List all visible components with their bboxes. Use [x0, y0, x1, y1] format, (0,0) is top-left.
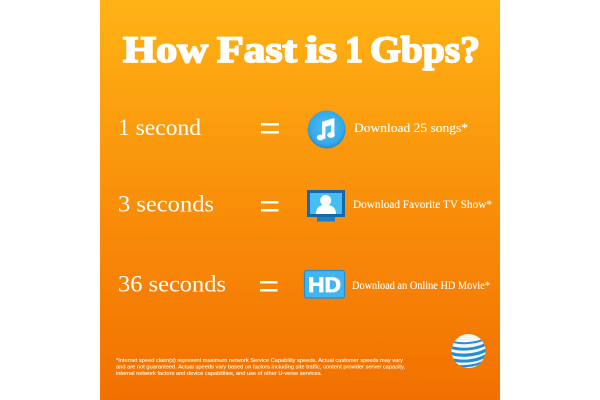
equals sign — [260, 281, 278, 292]
time label: 36 seconds — [118, 272, 226, 296]
title: 1 — [345, 30, 363, 71]
title: is — [305, 30, 337, 71]
icon: AT&T globe logo — [450, 334, 487, 368]
icon: TV with person — [307, 190, 345, 222]
description: Download an Online HD Movie* — [352, 280, 490, 292]
time label: 3 seconds — [118, 192, 214, 216]
icon: HD badge — [304, 270, 344, 298]
footnote: and are not guaranteed. Actual speeds vary based on factors including site traffic, content provider server capacity, — [116, 364, 405, 370]
title: How — [123, 30, 208, 71]
description: Download 25 songs* — [354, 121, 468, 135]
time label: 1 second — [118, 115, 202, 140]
equals sign — [261, 201, 278, 212]
orange background panel — [100, 0, 500, 400]
footnote — [116, 358, 405, 377]
icon: HD badge: HD — [308, 274, 341, 297]
row 2: 3 seconds — [118, 190, 492, 222]
icon: music note — [308, 110, 346, 148]
equals sign — [261, 123, 279, 134]
title: Fast — [217, 30, 298, 71]
footnote: internal network factors and device capabilities, and use of other U-verse services. — [116, 371, 322, 377]
row 3: 36 seconds — [118, 270, 490, 298]
title: Gbps? — [370, 30, 480, 71]
description: Download Favorite TV Show* — [353, 199, 492, 211]
footnote: *Internet speed claim(s) represent maximum network Service Capability speeds. Actual customer speeds may vary — [116, 358, 404, 364]
row 1: 1 second — [118, 110, 468, 148]
